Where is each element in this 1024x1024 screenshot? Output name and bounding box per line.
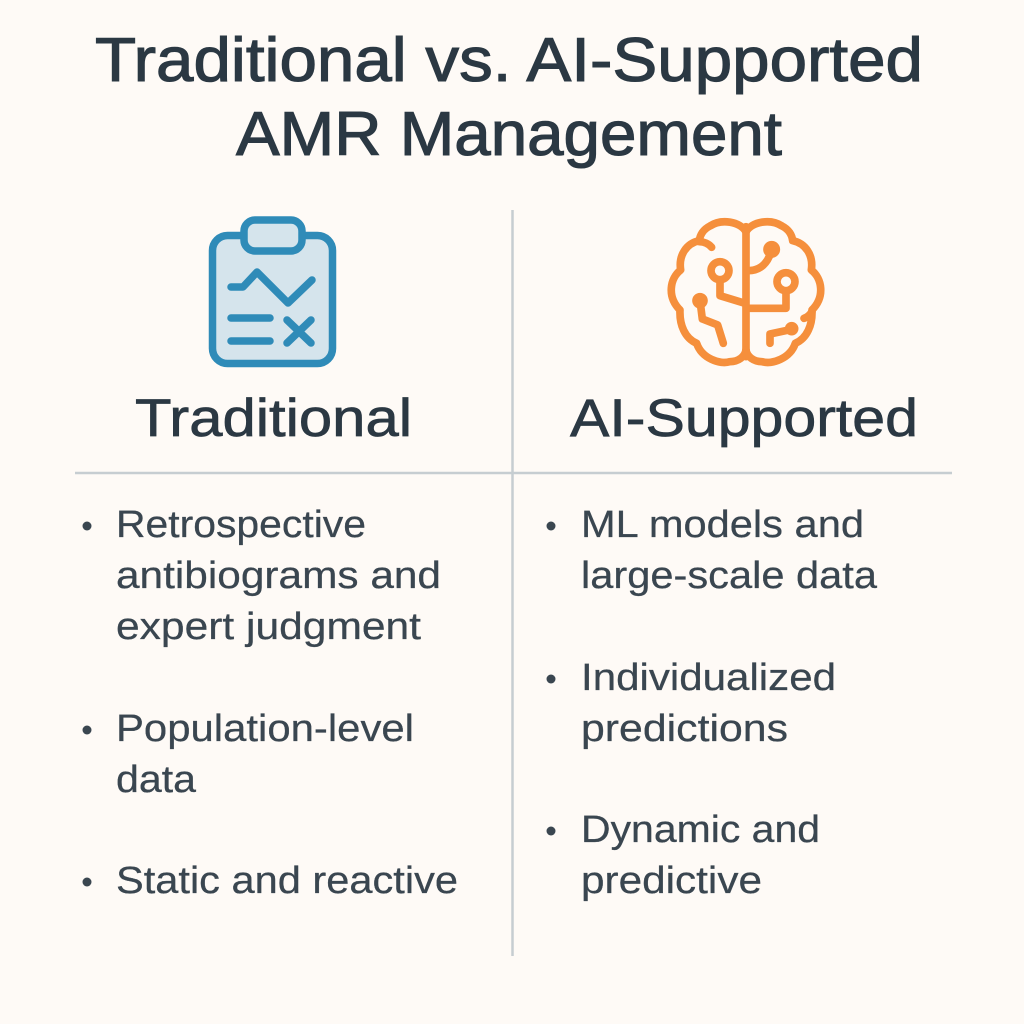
bullet: retrospective antibiograms: expert judgment xyxy=(116,606,421,648)
heading: Traditional: Traditional xyxy=(135,389,412,448)
traditional list xyxy=(82,504,458,902)
title: Traditional vs. AI-Supported xyxy=(95,26,923,95)
bullet: dynamic and predictive: predictive xyxy=(581,860,762,902)
bullet: individualized predictions xyxy=(546,657,836,750)
bullet: individualized predictions: predictions xyxy=(581,708,788,750)
bullet: dynamic and predictive: Dynamic and xyxy=(581,809,820,851)
bullet: population-level data: data xyxy=(116,759,197,801)
bullet: ML models: large-scale data xyxy=(581,555,878,597)
bullet: retrospective antibiograms: Retrospective xyxy=(116,504,366,546)
bullet: retrospective antibiograms: antibiograms and xyxy=(116,555,441,597)
bullet: individualized predictions: Individualized xyxy=(581,657,836,699)
title xyxy=(95,26,923,169)
bullet: ML models xyxy=(546,504,878,597)
bullet: retrospective antibiograms xyxy=(82,504,441,648)
bullet: population-level data: Population-level xyxy=(116,708,414,750)
icon: clipboard with chart xyxy=(212,220,332,364)
title: AMR Management xyxy=(236,100,782,169)
bullet: population-level data xyxy=(82,708,414,801)
icon: brain with circuits xyxy=(671,222,821,362)
bullet: dynamic and predictive xyxy=(546,809,820,902)
AI-supported list xyxy=(546,504,878,902)
heading: AI-Supported: AI-Supported xyxy=(570,389,918,448)
bullet: static and reactive: Static and reactive xyxy=(116,860,458,902)
bullet: ML models: ML models and xyxy=(581,504,864,546)
